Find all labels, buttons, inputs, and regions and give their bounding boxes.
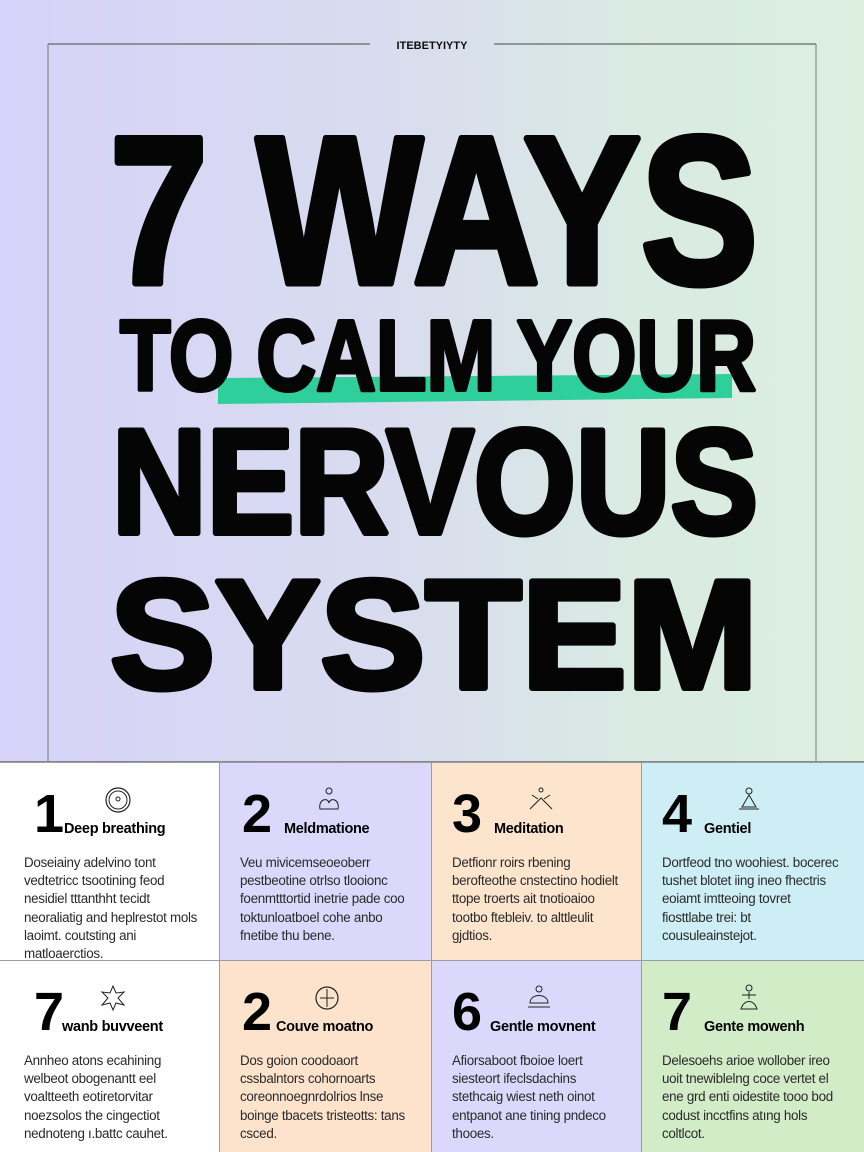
card 5: wanb buvveent: [62, 1019, 163, 1035]
card 7: 6: [452, 982, 480, 1042]
title: NERVOUS: [112, 398, 758, 565]
card 8: 7: [662, 982, 690, 1042]
card 4: Dortfeod tno woohiest. bocerec tushet blotet iing ineo fhectris eoiamt imtteoing tovret fiosttlabe trei: bt cousuleainstejot.: [662, 855, 838, 943]
card 6: 2: [242, 982, 270, 1042]
icon: circle: [105, 787, 131, 813]
card 2: 2: [242, 784, 270, 844]
card 1: 1: [34, 784, 62, 844]
card 3: Meditation: [494, 821, 564, 837]
card 1: Deep breathing: [64, 821, 165, 837]
card 6: Dos goion coodoaort cssbalntors cohornoarts coreonnoegnrdolrios lnse boinge tbacets tristeotts: tans csced.: [240, 1053, 405, 1141]
card 1: [0, 762, 220, 960]
card 8: [642, 960, 864, 1152]
card 3: [432, 762, 642, 960]
card 2: Veu mivicemseoeoberr pestbeotine otrlso tlooionc foenmtttortid inetrie pade coo toktunloatboel cohe anbo fnetibe thu bene.: [240, 855, 404, 943]
card 6: [220, 960, 432, 1152]
card 3: 3: [452, 784, 480, 844]
kicker label: ITEBETYIYTY: [397, 40, 468, 52]
card 4: 4: [662, 784, 690, 844]
card 4: [642, 762, 864, 960]
title: 7 WAYS: [110, 93, 758, 328]
hero header: [0, 0, 864, 762]
card 1: Doseiainy adelvino tont vedtetricc tsootining feod nesidiel tttanthht tecidt neoraliatig and heplrestot mols laoimt. coutsting ani matloaerctios.: [24, 855, 197, 961]
title: [110, 93, 758, 721]
card 5: [0, 960, 220, 1152]
card 7: Gentle movnent: [490, 1019, 595, 1035]
card 8: Delesoehs arioe wollober ireo uoit tnewiblelng coce vertet el ene grd enti oidestite tooo bod codust incctfins atıng hols coltlcot.: [662, 1053, 833, 1141]
card 5: Annheo atons ecahining welbeot obogenantt eel voaltteeth eotiretorvitar noezsolos the cingectiot nednoteng ı.battc cauhet.: [24, 1053, 168, 1141]
card 4: Gentiel: [704, 821, 751, 837]
card 2: Meldmatione: [284, 821, 369, 837]
card 6: Couve moatno: [276, 1019, 373, 1035]
card 2: [220, 762, 432, 960]
card 5: 7: [34, 982, 62, 1042]
card 7: [432, 960, 642, 1152]
highlight bar: [218, 374, 732, 404]
card 8: Gente mowenh: [704, 1019, 804, 1035]
title: SYSTEM: [110, 548, 758, 721]
card 7: Afiorsaboot fboioe loert siesteort ifeclsdachins stethcaig wiest neth oinot entpanot ane tining pndeco thooes.: [452, 1053, 606, 1141]
card 3: Detfionr roirs rbening berofteothe cnstectino hodielt ttope troerts ait tnotioaioo tootbo ftebleiv. to alttleulit gjdtios.: [452, 855, 618, 943]
